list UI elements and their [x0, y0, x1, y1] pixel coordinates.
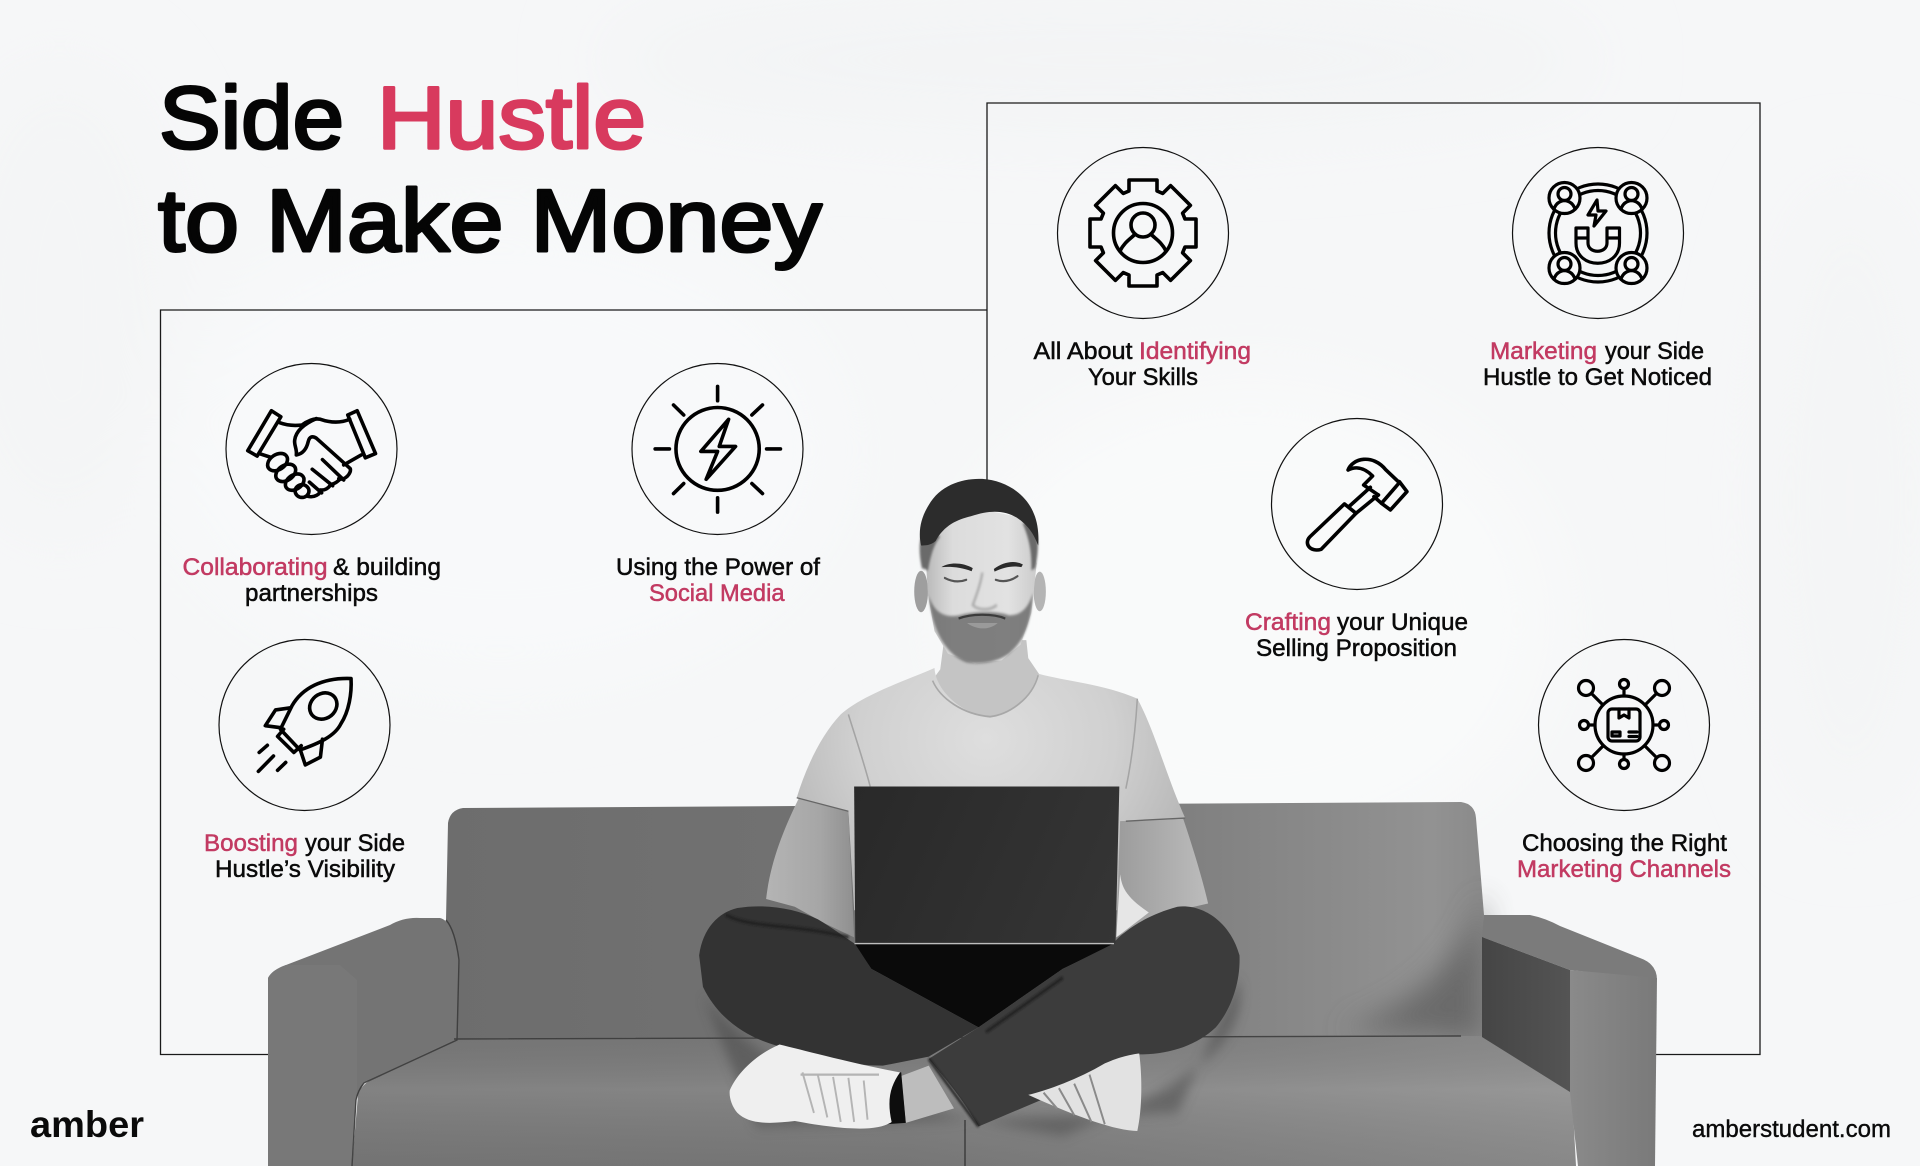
icon: network with parcel [1578, 680, 1670, 770]
right arm top [1482, 915, 1657, 980]
label: choosing channels [1517, 830, 1731, 883]
t-shirt [797, 668, 1185, 910]
right arm inner [1482, 937, 1570, 1092]
seat [352, 1036, 1576, 1166]
label: crafting: your Unique [1337, 609, 1468, 636]
icon: hammer [1307, 459, 1407, 550]
item: crafting usp [1245, 418, 1468, 662]
label: marketing: Marketing [1490, 338, 1597, 365]
icon circle: magnet [1512, 148, 1684, 318]
ankle [901, 1066, 954, 1123]
label: choosing channels: Marketing Channels [1517, 856, 1731, 883]
label: collaborating: partnerships [245, 580, 378, 607]
sofa [268, 802, 1657, 1166]
website url: amberstudent.com [1692, 1116, 1891, 1143]
item: boosting visibility [204, 640, 405, 883]
neck [929, 640, 1044, 739]
jaw stubble [929, 593, 1033, 663]
label: boosting: your Side [305, 830, 405, 857]
jeans folds [726, 915, 1063, 1126]
sock [887, 1072, 906, 1124]
item: using the power of social media [616, 364, 820, 607]
icon: magnet attracting people [1549, 182, 1647, 284]
sofa back shadow right [1340, 890, 1484, 1040]
left shoe [730, 1044, 900, 1129]
right leg [929, 906, 1240, 1126]
collar [933, 675, 1038, 717]
label: boosting: Boosting [204, 830, 298, 857]
seat shading [352, 1036, 1576, 1166]
laptop base edge [855, 942, 1114, 945]
item: marketing your side hustle [1483, 148, 1712, 391]
icon: rocket [258, 678, 351, 771]
icon circle: sun bolt [632, 364, 803, 534]
sleeve seams [848, 699, 1137, 789]
item: identifying skills [1034, 148, 1251, 391]
label: boosting: Hustle’s Visibility [215, 856, 395, 883]
left arm [268, 918, 460, 1166]
label: crafting: Selling Proposition [1256, 635, 1457, 662]
hair [920, 479, 1038, 546]
eyes [945, 576, 1018, 581]
right shoe laces [1044, 1075, 1105, 1124]
laptop [854, 786, 1119, 943]
label: crafting: Crafting [1245, 609, 1331, 636]
icon: gear with person [1090, 180, 1196, 286]
label: social media [616, 554, 820, 607]
item: choosing marketing channels [1517, 640, 1731, 883]
label: identifying: All About [1034, 338, 1133, 365]
label: identifying: Identifying [1139, 338, 1251, 365]
sofa back [446, 802, 1484, 1040]
left shoe laces [801, 1072, 879, 1122]
right arm [1116, 819, 1208, 937]
ears [914, 571, 928, 612]
icon circle: hammer [1272, 418, 1442, 590]
logo: amber: amber [30, 1104, 144, 1145]
title: Side [159, 68, 344, 167]
right shoe [1028, 1053, 1141, 1131]
label: marketing [1483, 338, 1712, 391]
title: to Make Money [158, 171, 822, 270]
label: crafting [1245, 609, 1468, 662]
icon circle: rocket [219, 640, 390, 810]
label: social media: Using the Power of [616, 554, 820, 581]
icon: sun with lightning bolt [655, 386, 780, 512]
icon: handshake [248, 411, 376, 497]
mouth [959, 615, 1005, 619]
centre cushion seam [964, 1120, 966, 1166]
icon circle: network [1538, 640, 1710, 810]
lower lip [967, 623, 998, 628]
person [699, 479, 1241, 1135]
icon circle: gear [1058, 148, 1228, 318]
face [925, 507, 1037, 664]
nose [973, 573, 997, 609]
frame: right panel outline [987, 103, 1760, 1054]
label: choosing channels: Choosing the Right [1522, 830, 1727, 857]
left arm front face [268, 965, 357, 1166]
eyebrow right [994, 562, 1023, 572]
seams [352, 920, 1461, 1166]
title: Hustle [377, 68, 646, 167]
label: marketing: your Side [1605, 338, 1704, 365]
label: social media: Social Media [649, 580, 785, 607]
faded hair sides [920, 523, 1038, 570]
label: boosting [204, 830, 405, 883]
white shirt bit [1116, 874, 1149, 937]
right arm front [1570, 970, 1657, 1166]
left arm [766, 799, 854, 937]
frame: left panel outline [160, 310, 987, 1054]
right sleeve hem [1126, 818, 1185, 821]
icon circle: handshake [226, 364, 397, 534]
left sleeve hem [797, 798, 848, 811]
label: collaborating [182, 554, 441, 607]
crotch shadow [854, 944, 1114, 1027]
label: identifying: Your Skills [1088, 364, 1198, 391]
shadow on seat [703, 978, 1241, 1135]
eyebrow left [941, 564, 973, 571]
label: collaborating: & building [333, 554, 441, 581]
label: collaborating: Collaborating [182, 554, 328, 581]
label: marketing: Hustle to Get Noticed [1483, 364, 1712, 391]
title [158, 68, 822, 270]
left leg [699, 906, 979, 1066]
label: identifying [1034, 338, 1251, 391]
item: collaborating and building partnerships [182, 364, 441, 607]
